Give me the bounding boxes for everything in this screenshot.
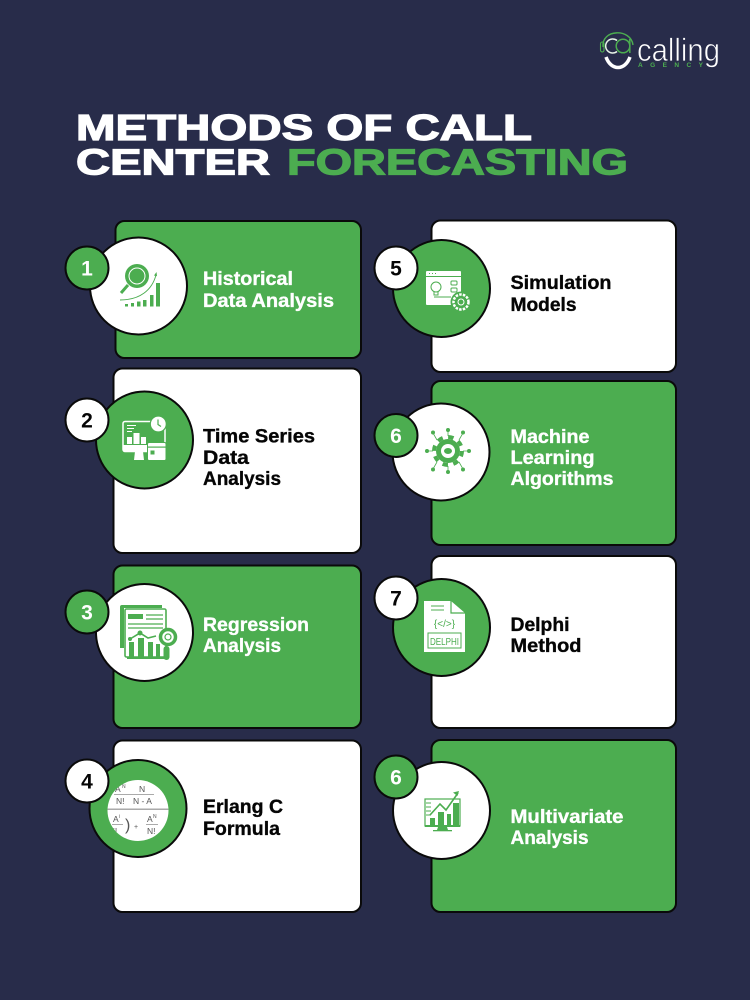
panel: card 6 machine learning algorithms — [374, 381, 676, 545]
logo — [600, 32, 720, 69]
title: FORECASTING — [287, 142, 628, 182]
icon: erlang formula: N! — [116, 796, 124, 806]
icon circle 6 — [392, 404, 490, 500]
panel: card 8 multivariate analysis — [374, 740, 676, 912]
label 1: Historical — [203, 268, 293, 290]
logo wordmark: calling — [637, 32, 720, 68]
label 6 — [510, 426, 614, 490]
logo headset mark — [600, 33, 633, 68]
icon circle 2 — [96, 392, 193, 488]
badge 8: 6 — [390, 766, 402, 790]
icon circle 8 — [393, 762, 490, 859]
label 4: Formula — [203, 818, 280, 840]
icon: delphi file — [424, 601, 465, 652]
label 5: Simulation — [510, 272, 612, 294]
icon: erlang formula: N — [153, 814, 157, 820]
icon: monitor with clock and calendar — [123, 416, 166, 460]
label 3 — [203, 614, 309, 657]
icon: erlang formula — [108, 780, 168, 841]
label 5 — [510, 272, 612, 316]
panel: card 1 historical data analysis — [66, 221, 361, 358]
logo tagline: AGENCY — [638, 62, 704, 69]
icon circle 5 — [393, 240, 490, 337]
label 8 — [510, 806, 624, 849]
icon: delphi file: {</>} — [434, 619, 456, 630]
icon: erlang formula: N - A — [133, 796, 152, 806]
label 8: Multivariate — [510, 806, 624, 828]
icon: erlang formula: A — [147, 814, 153, 824]
panel: card 3 regression analysis — [66, 566, 361, 728]
label 3: Analysis — [203, 635, 281, 657]
label 2 — [203, 426, 315, 490]
label 8: Analysis — [510, 827, 589, 849]
icon: erlang formula: N — [139, 784, 145, 794]
icon circle 3 — [96, 584, 193, 681]
badge 6: 6 — [390, 425, 402, 448]
icon: erlang formula: i! — [113, 826, 117, 836]
label 1 — [203, 268, 334, 312]
icon: erlang formula: A — [115, 784, 121, 794]
badge 1 — [66, 246, 108, 290]
panel: card 7 delphi method — [374, 556, 676, 728]
icon: erlang formula: + — [134, 824, 138, 831]
badge 5: 5 — [390, 258, 402, 280]
icon: erlang formula: A — [113, 814, 119, 824]
badge 8 — [374, 756, 418, 798]
badge 4: 4 — [81, 770, 93, 794]
panel: card 4 erlang c formula — [66, 740, 361, 912]
icon: report with chart and magnifier — [120, 605, 176, 660]
label 4: Erlang C — [203, 796, 283, 818]
panel: card 5 simulation models — [374, 220, 676, 372]
label 7: Method — [510, 635, 582, 657]
icon: simulation window with bulb and gear — [426, 271, 472, 312]
title: METHODS OF CALL — [76, 107, 532, 148]
label 6: Learning — [510, 447, 594, 469]
icon: erlang formula: i — [119, 814, 120, 820]
icon circle 1 — [90, 238, 187, 334]
label 7 — [510, 614, 582, 657]
label 4 — [203, 796, 283, 840]
badge 1: 1 — [81, 258, 93, 280]
icon: delphi file: DELPHI — [430, 636, 459, 648]
label 2: Analysis — [203, 468, 281, 490]
badge 6 — [374, 414, 418, 457]
badge 5 — [374, 246, 418, 290]
icon: monitor with growth chart — [425, 791, 460, 831]
icon: erlang formula: N — [122, 784, 126, 790]
label 2: Time Series — [203, 426, 315, 448]
badge 7: 7 — [390, 588, 402, 610]
icon: magnifier with rising bars — [120, 264, 160, 306]
icon: erlang formula: ) — [125, 817, 130, 834]
badge 2: 2 — [81, 410, 93, 432]
label 7: Delphi — [510, 614, 570, 636]
icon circle 7 — [393, 579, 490, 676]
icon: erlang formula: N! — [147, 826, 156, 836]
label 3: Regression — [203, 614, 309, 636]
badge 7 — [374, 576, 418, 620]
badge 2 — [66, 398, 108, 442]
badge 3 — [66, 590, 108, 634]
label 6: Machine — [510, 426, 590, 448]
badge 3: 3 — [81, 602, 93, 624]
icon circle 4 — [90, 760, 186, 857]
badge 4 — [66, 760, 108, 802]
icon: gear with brain and nodes — [425, 428, 471, 474]
label 5: Models — [510, 294, 577, 316]
panel: card 2 time series data analysis — [66, 368, 361, 553]
label 1: Data Analysis — [203, 290, 334, 312]
title — [76, 107, 628, 182]
label 6: Algorithms — [510, 468, 614, 490]
title: CENTER — [76, 142, 270, 182]
label 2: Data — [203, 447, 249, 469]
